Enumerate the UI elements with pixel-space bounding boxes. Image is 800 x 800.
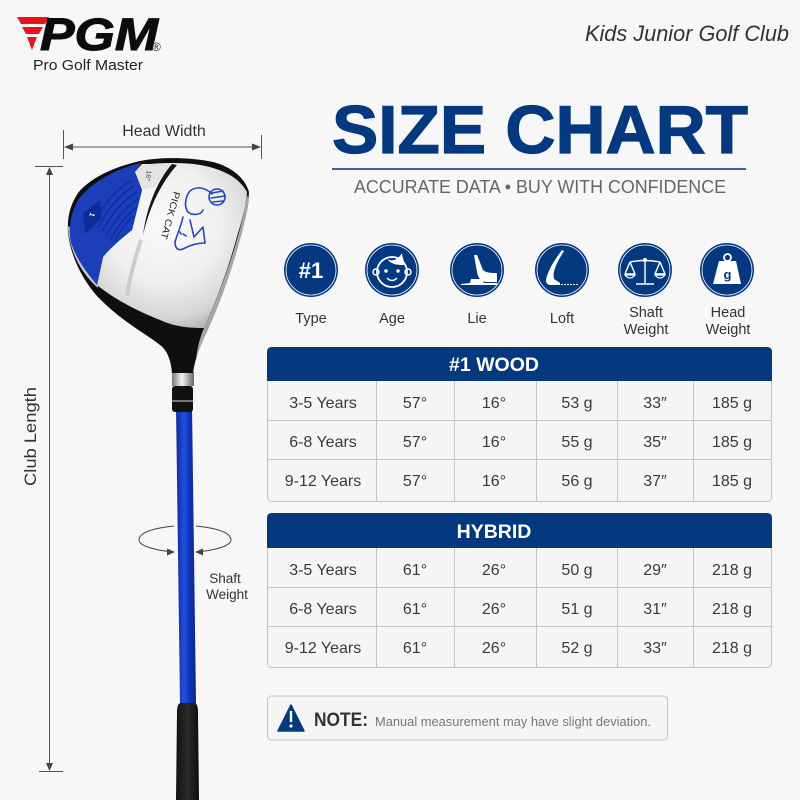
club head [68,158,249,373]
table: hybrid [267,513,772,668]
head width label: Head Width [122,123,206,140]
row: 9-12 years [285,640,752,657]
label: lie: Lie [467,311,487,327]
dimension: head width [64,123,262,159]
icon: type [284,243,338,297]
label: head weight: Weight [706,322,750,338]
row: 3-5 years: 3-5 Years [289,395,357,412]
note label: NOTE: [314,710,368,731]
label: shaft weight: Weight [624,322,668,338]
row: 9-12 years [285,473,752,490]
table frame [268,514,772,668]
head blue sole section [70,163,142,285]
table grid [267,381,771,501]
icon: loft [535,243,589,297]
row: 9-12 years: 57° [403,473,427,490]
row: 6-8 years: 218 g [712,601,752,618]
row: 9-12 years: 52 g [561,640,593,657]
note text: Manual measurement may have slight deviation. [375,714,651,729]
loft mark: 16° [143,170,153,182]
logo wordmark: PGM [40,9,160,60]
row: 6-8 years: 6-8 Years [289,601,357,618]
row: 3-5 years: 16° [482,395,506,412]
row: 6-8 years: 185 g [712,434,752,451]
head silver crown [97,163,247,328]
row: 6-8 years: 31″ [643,601,667,618]
row: 9-12 years: 26° [482,640,506,657]
title: SIZE CHART [332,92,748,168]
club grip [176,703,199,800]
icon: warning triangle [278,705,304,731]
row: 6-8 years: 61° [403,601,427,618]
shaft weight label: Weight [206,587,248,602]
title underline [332,168,746,170]
row: 3-5 years: 33″ [643,395,667,412]
dimension: club length [21,166,63,772]
product name: Kids Junior Golf Club [585,21,789,46]
table grid [267,548,771,667]
row: 6-8 years: 26° [482,601,506,618]
PICK CAT text: PICK CAT [158,190,182,241]
label: type: Type [295,311,327,327]
row: 3-5 years [289,395,752,412]
note box [268,696,668,740]
label: age: Age [379,311,405,327]
row: 3-5 years: 61° [403,562,427,579]
head blue badge [83,200,101,234]
row: 6-8 years: 6-8 Years [289,434,357,451]
head soft stripe [127,240,141,296]
cat logo drawing [175,188,225,250]
column labels [295,305,750,338]
icon: head weight [700,243,754,297]
row: 3-5 years: 57° [403,395,427,412]
head grooves [88,177,141,244]
row: 9-12 years: 9-12 Years [285,640,361,657]
head left silver rim [68,226,98,288]
logo tagline: Pro Golf Master [33,57,143,74]
icon: age [365,243,419,297]
row: 9-12 years: 33″ [643,640,667,657]
dimension: shaft weight [139,526,248,602]
row: 3-5 years [289,562,752,579]
rotation arrow [139,526,231,556]
label: shaft weight: Shaft [629,305,663,321]
row: 3-5 years: 26° [482,562,506,579]
club ferrule [172,372,194,412]
head crown stripe [143,164,177,235]
head loft plate [135,164,172,190]
row: 3-5 years: 185 g [712,395,752,412]
golf club illustration [68,158,249,800]
icon: shaft weight [618,243,672,297]
row: 6-8 years [289,601,752,618]
table header bar [267,347,772,381]
label: head weight: Head [711,305,745,321]
table header bar [267,513,772,548]
row: 6-8 years: 57° [403,434,427,451]
row: 3-5 years: 3-5 Years [289,562,357,579]
club length label: Club Length [21,387,40,486]
row: 9-12 years: 185 g [712,473,752,490]
head black body [68,158,249,373]
row: 9-12 years: 61° [403,640,427,657]
table frame [268,348,772,502]
row: 9-12 years: 218 g [712,640,752,657]
row: 6-8 years [289,434,752,451]
icon: red triangle mark [17,17,49,50]
row: 6-8 years: 55 g [561,434,593,451]
row: 6-8 years: 16° [482,434,506,451]
club shaft [176,405,196,704]
row: 9-12 years: 37″ [643,473,667,490]
table heading: #1 WOOD [449,354,539,376]
logo: PGM Pro Golf Master [17,9,161,74]
table heading: HYBRID [457,521,531,543]
row: 9-12 years: 16° [482,473,506,490]
icon row [284,243,754,297]
head right edge highlight [196,195,249,360]
row: 3-5 years: 29″ [643,562,667,579]
row: 9-12 years: 9-12 Years [285,473,361,490]
row: 6-8 years: 35″ [643,434,667,451]
row: 3-5 years: 218 g [712,562,752,579]
icon: head weight: g [724,267,732,282]
subtitle: ACCURATE DATA • BUY WITH CONFIDENCE [354,177,726,197]
registered mark: ® [152,40,161,54]
table: #1 wood [267,347,772,502]
icon: type: #1 [299,258,323,283]
row: 6-8 years: 51 g [561,601,593,618]
head blue badge: 1 [87,211,95,218]
callout: note [268,696,668,740]
row: 3-5 years: 53 g [561,395,593,412]
row: 9-12 years: 56 g [561,473,593,490]
label: loft: Loft [550,311,574,327]
icon: lie [450,243,504,297]
row: 3-5 years: 50 g [561,562,593,579]
shaft weight label: Shaft [209,571,241,586]
